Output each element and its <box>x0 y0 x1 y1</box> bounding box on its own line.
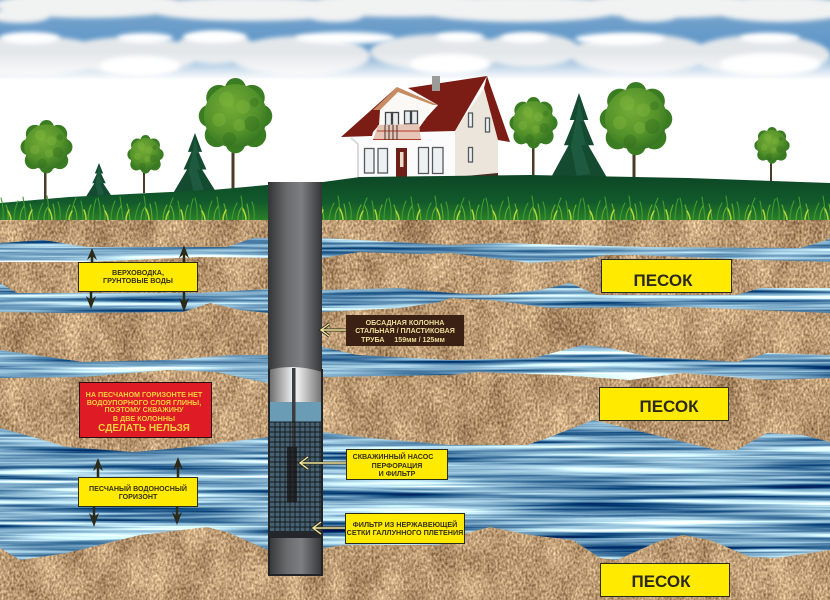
upper casing pipe <box>268 182 322 372</box>
trees behind hill, left <box>21 78 272 201</box>
warning box <box>80 382 212 438</box>
label: mesh filter <box>346 514 464 544</box>
dormer wall <box>379 92 433 125</box>
label: pump and perforation: И ФИЛЬТР <box>379 470 416 478</box>
sand layers <box>0 220 830 600</box>
downpipe <box>351 138 358 177</box>
front wall <box>358 132 455 178</box>
label: sandy aquifer <box>78 478 198 506</box>
tree 6 <box>754 127 790 184</box>
arrow: to mesh filter <box>313 522 346 534</box>
label: sand upper <box>602 260 732 292</box>
warning box: СДЕЛАТЬ НЕЛЬЗЯ <box>98 423 190 434</box>
warning box: ВОДОУПОРНОГО СЛОЯ ГЛИНЫ, <box>87 398 201 407</box>
steps <box>388 177 407 182</box>
warning box: НА ПЕСЧАНОМ ГОРИЗОНТЕ НЕТ <box>86 390 203 399</box>
front windows <box>364 113 490 174</box>
spruce 2 <box>173 133 217 196</box>
spruce 3 <box>550 93 608 183</box>
label: sand lower: ПЕСОК <box>631 572 691 591</box>
label: sand middle: ПЕСОК <box>639 397 699 416</box>
trees behind hill, right <box>509 82 790 194</box>
label: casing pipe <box>346 315 464 346</box>
foundation <box>358 177 390 180</box>
label: sandy aquifer: ПЕСЧАНЫЙ ВОДОНОСНЫЙ <box>89 484 187 493</box>
label: sand middle <box>600 388 728 420</box>
tree 5 <box>600 82 672 194</box>
label: pump and perforation <box>346 450 448 480</box>
warning box: В ДВЕ КОЛОННЫ <box>113 414 175 423</box>
label: casing pipe: ТРУБА 159мм / 125мм <box>361 336 445 344</box>
tree 3 <box>199 78 272 191</box>
house <box>341 76 510 182</box>
arrow: to casing <box>321 324 346 336</box>
riser tube <box>292 368 296 448</box>
chimney <box>432 76 440 91</box>
well casing and filter <box>268 182 322 576</box>
tree 2 <box>127 135 164 193</box>
dormer trim <box>373 87 438 110</box>
filter mesh <box>270 422 322 538</box>
arrows: sandy aquifer <box>89 457 183 527</box>
spruce 1 <box>86 163 112 198</box>
arrow: to pump <box>300 457 346 469</box>
label: sand lower <box>600 564 730 596</box>
door <box>396 148 407 177</box>
underground water <box>0 220 830 600</box>
balcony <box>373 124 421 140</box>
label: perched groundwater <box>78 262 198 292</box>
label: pump and perforation: ПЕРФОРАЦИЯ <box>372 462 422 470</box>
dormer windows <box>386 111 418 126</box>
label: perched groundwater: ВЕРХОВОДКА, <box>112 268 164 277</box>
tree 1 <box>21 120 72 201</box>
label: casing pipe: СТАЛЬНАЯ / ПЛАСТИКОВАЯ <box>355 327 455 335</box>
label: mesh filter: СЕТКИ ГАЛЛУННОГО ПЛЕТЕНИЯ <box>347 528 463 537</box>
label: sandy aquifer: ГОРИЗОНТ <box>119 493 158 501</box>
cutaway inner wall <box>270 366 322 404</box>
label: pump and perforation: СКВАЖИННЫЙ НАСОС <box>353 452 433 461</box>
water in well <box>270 402 322 538</box>
side wall <box>455 88 498 178</box>
label: mesh filter: ФИЛЬТР ИЗ НЕРЖАВЕЮЩЕЙ <box>353 520 457 529</box>
lower casing sump <box>268 538 322 576</box>
label: sand upper: ПЕСОК <box>633 271 693 290</box>
grass hill <box>0 175 830 220</box>
arrows: perched water <box>86 245 189 312</box>
roof <box>341 76 510 142</box>
label: perched groundwater: ГРУНТОВЫЕ ВОДЫ <box>103 276 173 285</box>
label: casing pipe: ОБСАДНАЯ КОЛОННА <box>366 319 444 327</box>
sky with clouds <box>0 0 830 220</box>
tree 4 <box>509 97 558 176</box>
pump <box>287 447 297 502</box>
warning box: ПОЭТОМУ СКВАЖИНУ <box>104 405 184 414</box>
